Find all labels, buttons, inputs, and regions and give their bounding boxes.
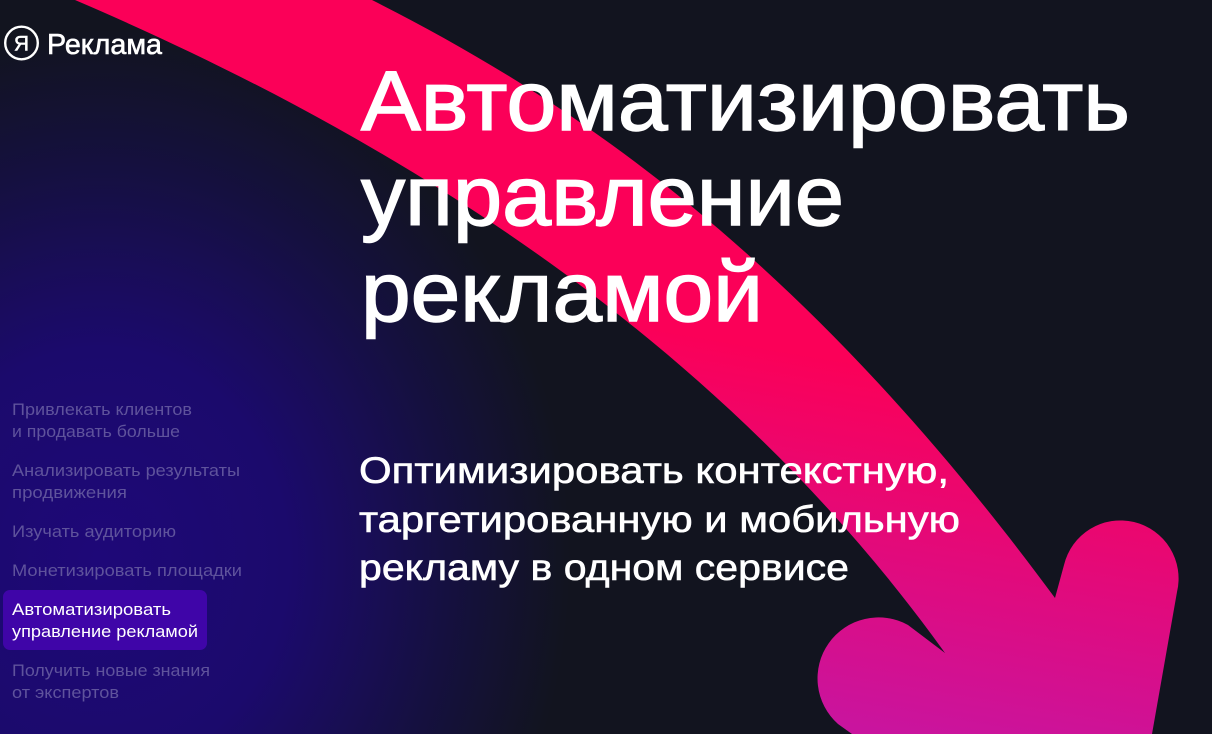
- menu item: attract customers: и продавать больше: [12, 422, 180, 441]
- menu item: attract customers: [12, 400, 192, 441]
- title: рекламой: [361, 245, 763, 339]
- navigation menu: [3, 400, 242, 702]
- active item highlight: [3, 590, 207, 650]
- subtitle: Оптимизировать контекстную,: [359, 449, 949, 491]
- title: [361, 54, 1130, 339]
- menu item: study audience: Изучать аудиторию: [12, 522, 176, 541]
- title: управление: [361, 149, 844, 243]
- subtitle: рекламу в одном сервисе: [359, 546, 849, 588]
- menu item: attract customers: Привлекать клиентов: [12, 400, 192, 419]
- logo wordmark: Реклама: [47, 29, 163, 61]
- title: Автоматизировать: [361, 54, 1130, 148]
- logo: Yandex Advertising: [5, 27, 163, 61]
- menu item: active automate: [3, 590, 207, 650]
- subtitle: таргетированную и мобильную: [359, 498, 960, 540]
- menu item: analyse results: продвижения: [12, 483, 127, 502]
- menu item: monetize: Монетизировать площадки: [12, 561, 242, 580]
- menu item: analyse results: [12, 461, 240, 502]
- menu item: new knowledge: [12, 661, 210, 702]
- menu item: active automate: Автоматизировать: [12, 600, 171, 619]
- logo letter: Я: [14, 32, 29, 56]
- icon: logo circle: [5, 27, 38, 59]
- menu item: new knowledge: Получить новые знания: [12, 661, 210, 680]
- menu item: new knowledge: от экспертов: [12, 683, 119, 702]
- menu item: analyse results: Анализировать результаты: [12, 461, 240, 480]
- menu item: active automate: управление рекламой: [12, 622, 198, 641]
- subtitle: [359, 449, 960, 588]
